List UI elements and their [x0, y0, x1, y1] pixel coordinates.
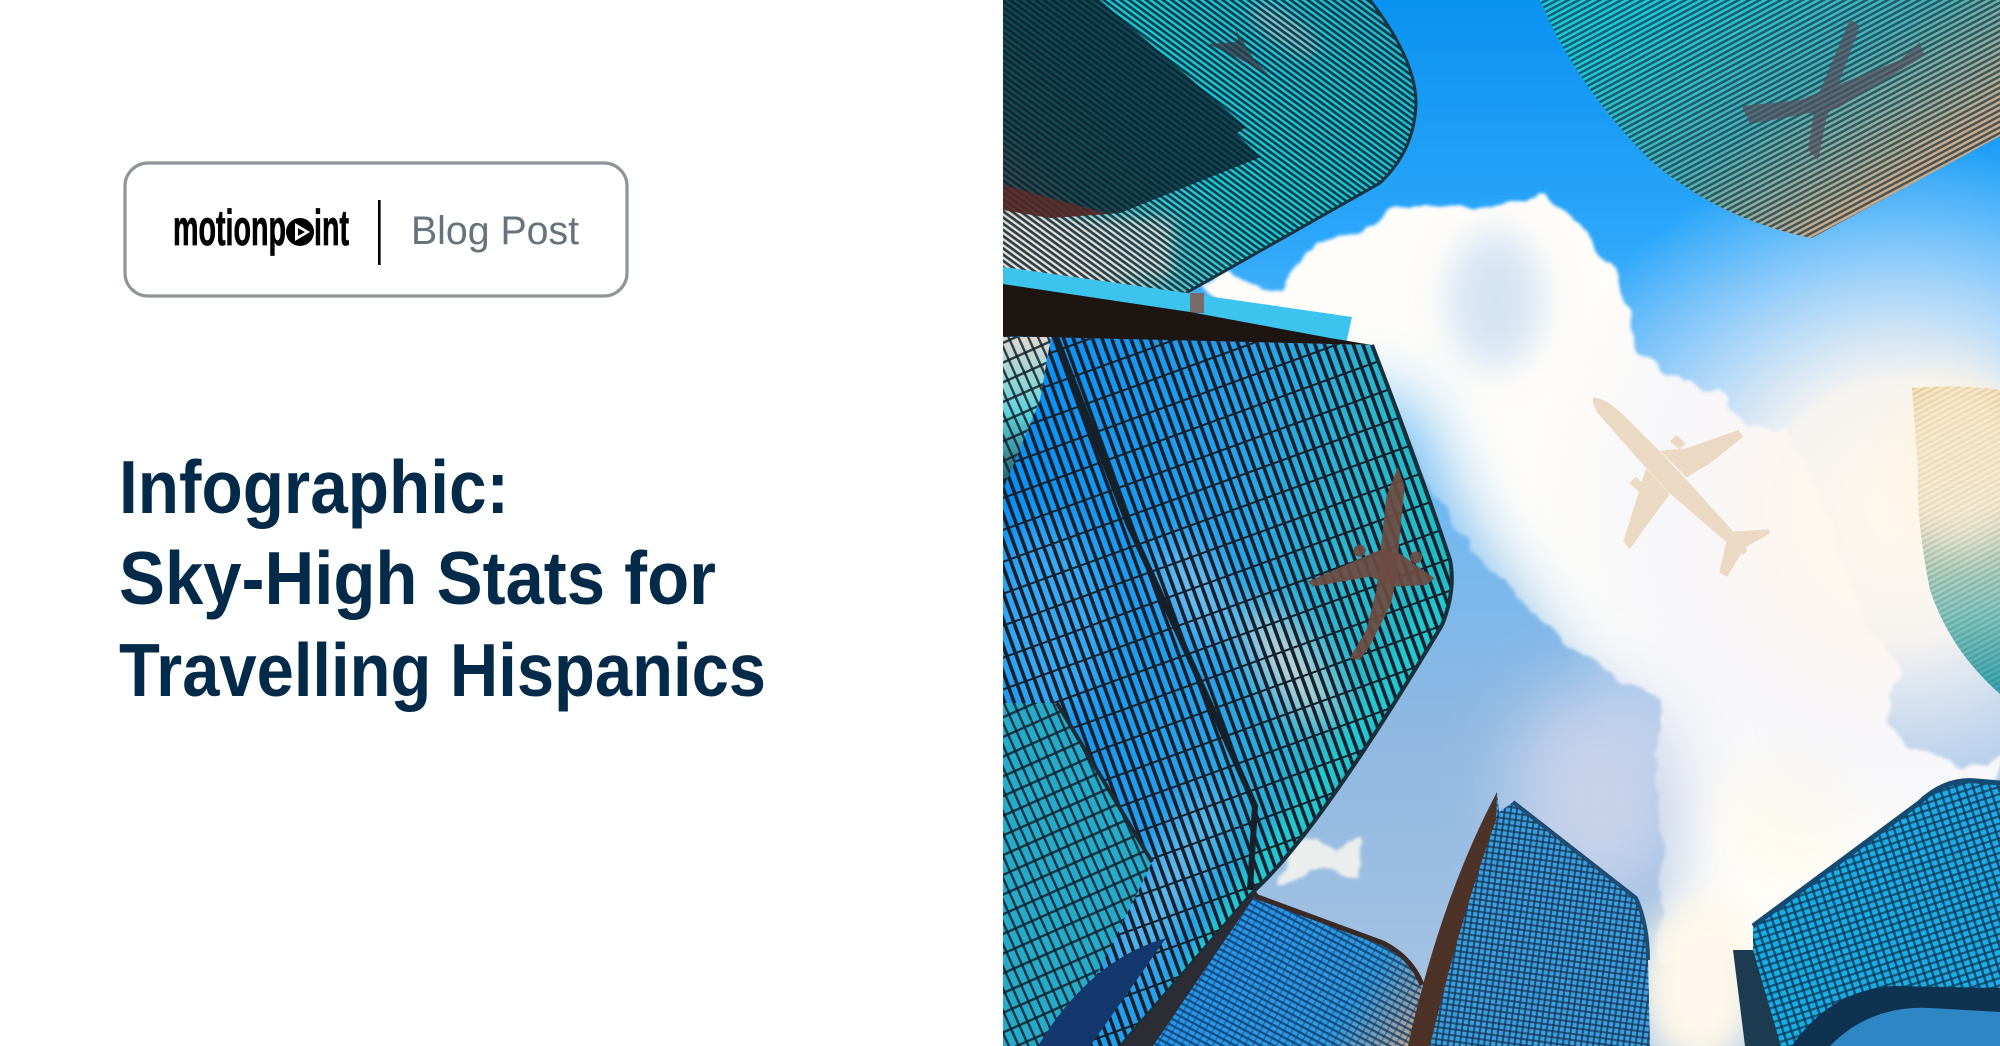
bottom right building: [1733, 781, 2000, 1046]
lower cloud reflection: [1102, 774, 1238, 986]
reflected plane, top right: [1742, 19, 1924, 160]
clouds: [1200, 196, 2000, 1046]
lower left tower: [1003, 703, 1152, 1046]
middle building: [990, 267, 1463, 1046]
logo: motionpoint: motionp: [173, 200, 286, 256]
arch windows: [1830, 1008, 2000, 1046]
right wing: [1660, 430, 1743, 477]
top right building: [1540, 0, 2000, 238]
bottom center-left building: [1121, 890, 1422, 1046]
sun glow: [1588, 156, 2000, 780]
badge label: Blog Post: [411, 209, 579, 253]
cyan curved edge: [1162, 591, 1448, 995]
reflected plane, top left: [1208, 30, 1270, 76]
pale reflection patches: [1003, 0, 1327, 278]
left dark tower: [1003, 337, 1051, 490]
dark dome: [1038, 938, 1166, 1046]
facade: [990, 336, 1463, 1046]
tower brown edge: [1408, 792, 1497, 1046]
reddish lower reflection: [1003, 185, 1110, 218]
title: Infographic:: [119, 445, 509, 529]
pale cloud reflection: [1229, 593, 1351, 737]
small dark tower: [1733, 950, 1782, 1046]
sky: [1003, 0, 2000, 1046]
roof post: [1190, 293, 1204, 313]
small left cloud: [1278, 836, 1364, 882]
badge divider: [378, 200, 381, 265]
airplane: [1593, 398, 1770, 577]
cyan roof strip: [1003, 267, 1352, 344]
badge outline: [125, 163, 627, 296]
far right building: [1912, 386, 2000, 694]
engines: [1670, 435, 1686, 449]
left wing: [1623, 468, 1670, 549]
lower right cloud: [1750, 802, 1820, 850]
bottom center tower: [1408, 792, 1650, 1046]
logo: motionpoint: int: [314, 200, 349, 256]
lilac sky below cloud: [1510, 680, 1690, 900]
fuselage: [1593, 398, 1747, 555]
reflected plane, middle building: [1308, 467, 1435, 660]
panel: photo of skyscrapers and airplane: [990, 0, 2000, 1046]
dark reflection, top left: [1003, 0, 1261, 218]
top left building: [1003, 0, 1416, 293]
dark arch: [1792, 986, 2000, 1046]
title: Travelling Hispanics: [119, 628, 766, 712]
building outline: [1186, 0, 1416, 293]
facade edge: [1121, 345, 1452, 1046]
title: Sky-High Stats for: [119, 536, 716, 620]
dark roof: [1003, 284, 1372, 345]
cloud inner shading: [1447, 230, 1543, 370]
badge: motionpoint blog post: [125, 163, 627, 296]
sun flare over right buildings: [1890, 370, 2000, 550]
main mullion: [1056, 337, 1255, 890]
bottom cloud: [1638, 900, 1762, 1046]
title: [119, 445, 766, 712]
tail: [1719, 529, 1770, 577]
main cumulus cloud: [1200, 196, 2000, 960]
